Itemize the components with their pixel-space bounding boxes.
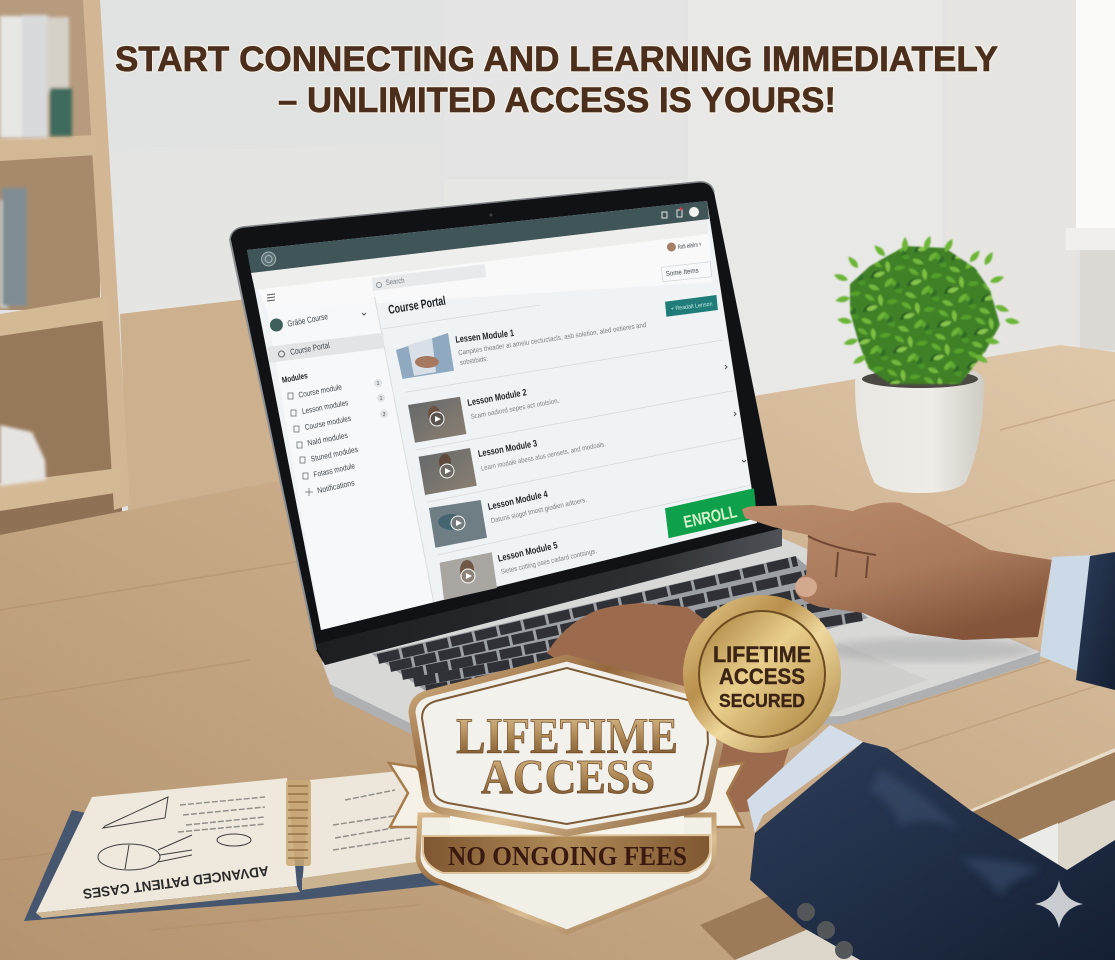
seal text: LIFETIME (713, 642, 811, 667)
book title: ADVANCED PATIENT CASES (82, 863, 270, 902)
top bar icons (662, 207, 699, 218)
ribbon tails (389, 763, 743, 827)
lesson module 5: Sietes cotting oses cadard contsings. (500, 548, 598, 576)
foliage (833, 235, 1020, 384)
lesson module 1: sobstibids. (460, 356, 488, 367)
thumbnail (795, 577, 817, 597)
resume lesson button (665, 295, 718, 317)
sidebar modules list: Lesson modules (301, 398, 349, 416)
lower shield (418, 815, 714, 932)
finger gaps (808, 536, 876, 578)
resume lesson button: + Readalt Lenson (671, 302, 713, 313)
lesson module 4: Lesson Module 4 (487, 489, 549, 513)
plant (833, 235, 1020, 493)
keyboard (372, 556, 868, 694)
spiral binding (286, 780, 311, 866)
lesson module 5: Lesson Module 5 (497, 540, 559, 565)
course selector (270, 311, 366, 332)
nav item: course portal (268, 333, 384, 363)
lesson module 4 (429, 489, 588, 548)
enroll button: ENROLL (682, 502, 739, 532)
lesson module 3: Lesson Module 3 (477, 438, 538, 460)
desk front edge (700, 750, 1115, 960)
nav item: course portal: Course Portal (289, 340, 330, 357)
sidebar divider (375, 297, 434, 602)
sidebar modules list: Course module (298, 382, 343, 400)
book body lines (178, 790, 410, 850)
sidebar modules list: Notifications (316, 478, 355, 495)
pointing hand and shirt cuff (742, 502, 1115, 690)
sidebar modules list: 1 (380, 396, 383, 402)
shadow under hand (825, 638, 1035, 662)
lifetime heading: LIFETIME (456, 709, 678, 765)
lesson module 2: Scam oadiord sepes act otolsion. (470, 398, 560, 421)
row dividers (382, 305, 751, 555)
logo (262, 252, 276, 266)
lesson module 2: Lesson Module 2 (467, 387, 528, 409)
sidebar modules list: Nald modules (307, 431, 349, 448)
app top bar (247, 201, 709, 273)
course selector: Gräöe Course (287, 311, 329, 329)
user menu (667, 242, 702, 252)
dropdown: Some Items (665, 268, 699, 278)
lesson module 4: Datuns siogol tmoet giodien adtoers. (490, 497, 588, 525)
typing hand (547, 603, 790, 815)
suit arm and cuff (747, 725, 1115, 960)
sleeve folds (870, 770, 1040, 895)
trackpad (790, 643, 928, 714)
sidebar modules list: Stuned modules (310, 445, 359, 464)
screen background (247, 201, 757, 630)
app header white band (251, 219, 712, 310)
shelf books (0, 15, 72, 486)
title (115, 40, 998, 120)
access heading: ACCESS (481, 749, 655, 804)
sidebar modules list: Fotass module (313, 461, 356, 479)
laptop lid (230, 182, 782, 665)
bookcase (0, 0, 130, 540)
sidebar modules list: 3 (383, 412, 386, 418)
camera (490, 214, 492, 216)
lesson module 5 (440, 540, 598, 600)
ribbon centre strip (450, 810, 684, 836)
title: START CONNECTING AND LEARNING IMMEDIATELY (115, 40, 998, 79)
search bar (372, 264, 486, 291)
lesson module 1: Lessen Module 1 (455, 328, 515, 346)
laptop base (322, 538, 1040, 738)
hamburger menu (267, 294, 275, 301)
lesson module 1 (396, 322, 727, 379)
wood wall panel (120, 280, 480, 510)
floor (735, 800, 1115, 960)
search bar: Search (385, 276, 405, 287)
lifetime access shield badge (389, 658, 743, 932)
pot (855, 371, 984, 493)
lesson module 2 (408, 387, 736, 443)
sidebar modules list (281, 370, 388, 496)
watermark sparkle icon (1035, 880, 1083, 928)
lesson module 1: Canpites theader at amelu cectuctacls, asb soletion, aled oetieres and (458, 322, 647, 357)
lesson module 3: Learn modale abess alus oensets, and modoals. (480, 441, 606, 473)
sidebar modules list: 1 (377, 381, 380, 387)
sidebar modules list: Modules (281, 370, 309, 385)
course portal heading: Course Portal (387, 294, 447, 317)
sidebar modules list: Course modules (304, 414, 352, 432)
seal text (713, 642, 811, 711)
lesson module 3 (419, 438, 746, 495)
user menu: Rafi elislm ˅ (678, 242, 702, 251)
suit buttons (797, 903, 853, 959)
title: – UNLIMITED ACCESS IS YOURS! (278, 81, 836, 120)
open notebook (24, 770, 440, 921)
enroll button (665, 488, 757, 538)
seal text: ACCESS (719, 664, 805, 689)
desk (0, 345, 1115, 960)
dropdown (661, 262, 711, 282)
sidebar (267, 296, 434, 630)
no ongoing fees band: NO ONGOING FEES (448, 841, 687, 871)
upper shield plate (412, 658, 720, 833)
seal text: SECURED (719, 691, 805, 711)
book diagram: brain (98, 797, 251, 870)
gold coin seal (683, 595, 841, 753)
